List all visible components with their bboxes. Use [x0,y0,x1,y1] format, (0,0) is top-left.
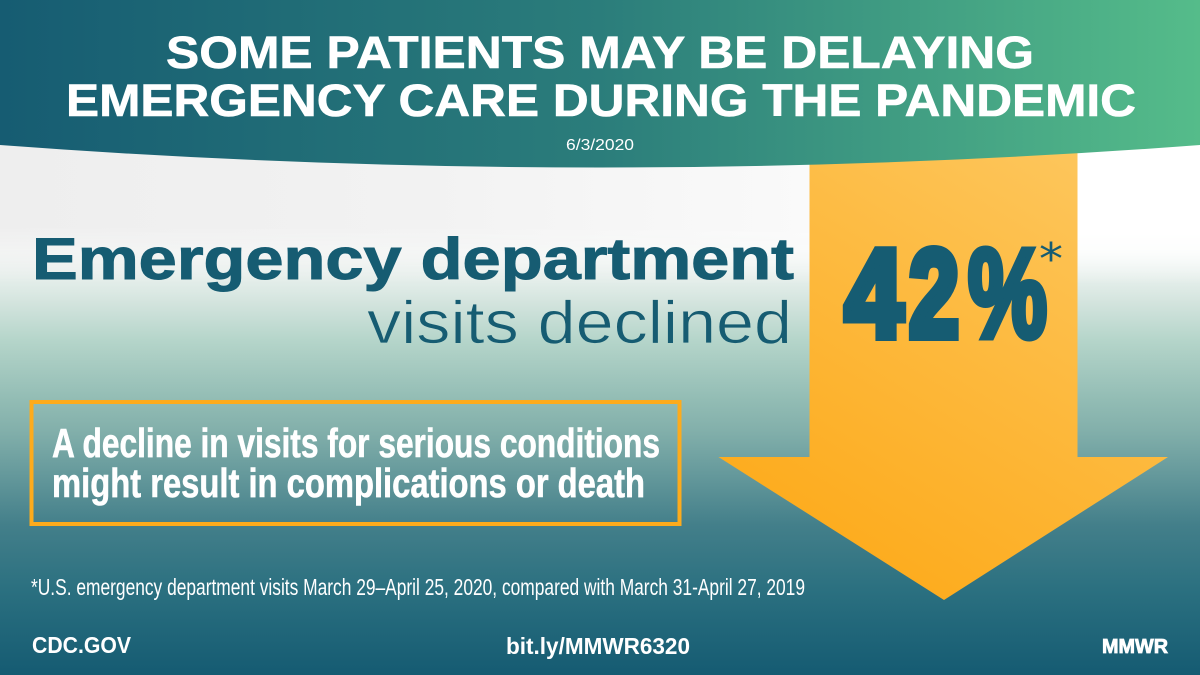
statistic: 42 percent: 2 [909,226,959,364]
callout box: A decline in visits for serious conditions [52,420,660,466]
heading: Emergency department: Emergency department [32,227,794,292]
footer: short link: bit.ly/MMWR6320 [506,633,690,659]
header banner [0,0,1200,168]
footer: MMWR logo: MMWR [1102,636,1169,658]
footer: CDC.GOV: CDC.GOV [32,632,132,658]
date: 6/3/2020 [566,137,634,154]
statistic: 42 percent: % [968,223,1047,364]
background top-left shading [0,145,540,248]
title [66,27,1136,126]
icon: large downward arrow [718,150,1168,600]
statistic: 42 percent: 4 [845,226,903,364]
title: EMERGENCY CARE DURING THE PANDEMIC [66,75,1136,126]
statistic: 42 percent [845,223,1063,364]
footnote: *U.S. emergency department visits March 29–April 25, 2020, compared with March 31-April 27, 2019 [31,574,805,600]
callout box [32,402,680,524]
asterisk: * [1039,234,1063,285]
callout box: might result in complications or death [52,460,645,506]
title: SOME PATIENTS MAY BE DELAYING [166,27,1034,78]
subheading: visits declined: visits declined [367,289,792,356]
